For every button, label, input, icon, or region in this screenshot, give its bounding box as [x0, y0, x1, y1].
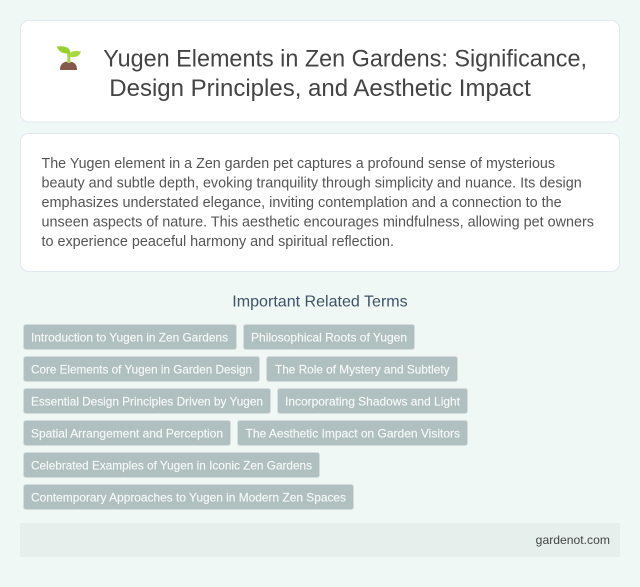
footer source text: gardenot.com	[536, 533, 610, 547]
chip: core elements: Core Elements of Yugen in Garden Design	[31, 362, 252, 376]
chip: spatial arrangement	[24, 420, 230, 446]
chip: mystery and subtlety: The Role of Mystery and Subtlety	[275, 362, 450, 376]
chip: shadows and light: Incorporating Shadows and Light	[285, 394, 461, 408]
text block: description: emphasizes understated elegance, inviting contemplation and a connection to the	[42, 195, 562, 211]
panel: description	[20, 134, 620, 272]
chip: philosophical roots	[244, 324, 414, 350]
chip: introduction	[24, 324, 236, 350]
chip: philosophical roots: Philosophical Roots of Yugen	[251, 330, 407, 344]
title: Yugen Elements in Zen Gardens: Significance,	[103, 46, 587, 73]
chip: introduction: Introduction to Yugen in Zen Gardens	[31, 330, 228, 344]
heading: related terms: Important Related Terms	[232, 294, 408, 311]
text block: description	[42, 156, 594, 250]
chip: design principles	[24, 388, 270, 414]
text block: description: beauty and subtle depth, evoking tranquility through simplicity and nuance. Its design	[42, 176, 582, 192]
chip: shadows and light	[278, 388, 468, 414]
chip: contemporary approaches: Contemporary Approaches to Yugen in Modern Zen Spaces	[31, 490, 346, 504]
chip: aesthetic impact	[238, 420, 468, 446]
title	[103, 46, 587, 102]
text block: description: The Yugen element in a Zen garden pet captures a profound sense of mysterious	[42, 156, 555, 172]
chip: contemporary approaches	[24, 484, 354, 510]
chip: celebrated examples: Celebrated Examples of Yugen in Iconic Zen Gardens	[31, 458, 312, 472]
title: Design Principles, and Aesthetic Impact	[109, 75, 531, 102]
panel: related term chips	[24, 324, 468, 510]
chip: design principles: Essential Design Principles Driven by Yugen	[31, 394, 263, 408]
chip: celebrated examples	[24, 452, 320, 478]
chip: aesthetic impact: The Aesthetic Impact on Garden Visitors	[246, 426, 460, 440]
footer	[20, 523, 620, 557]
icon: seedling	[57, 46, 81, 70]
text block: description: to experience peaceful harmony and spiritual reflection.	[42, 234, 394, 250]
chip: core elements	[24, 356, 260, 382]
chip: mystery and subtlety	[266, 356, 458, 382]
text block: description: unseen aspects of nature. This aesthetic encourages mindfulness, allowing pet owners	[42, 214, 594, 230]
panel: title card	[20, 20, 620, 122]
chip: spatial arrangement: Spatial Arrangement and Perception	[31, 426, 223, 440]
